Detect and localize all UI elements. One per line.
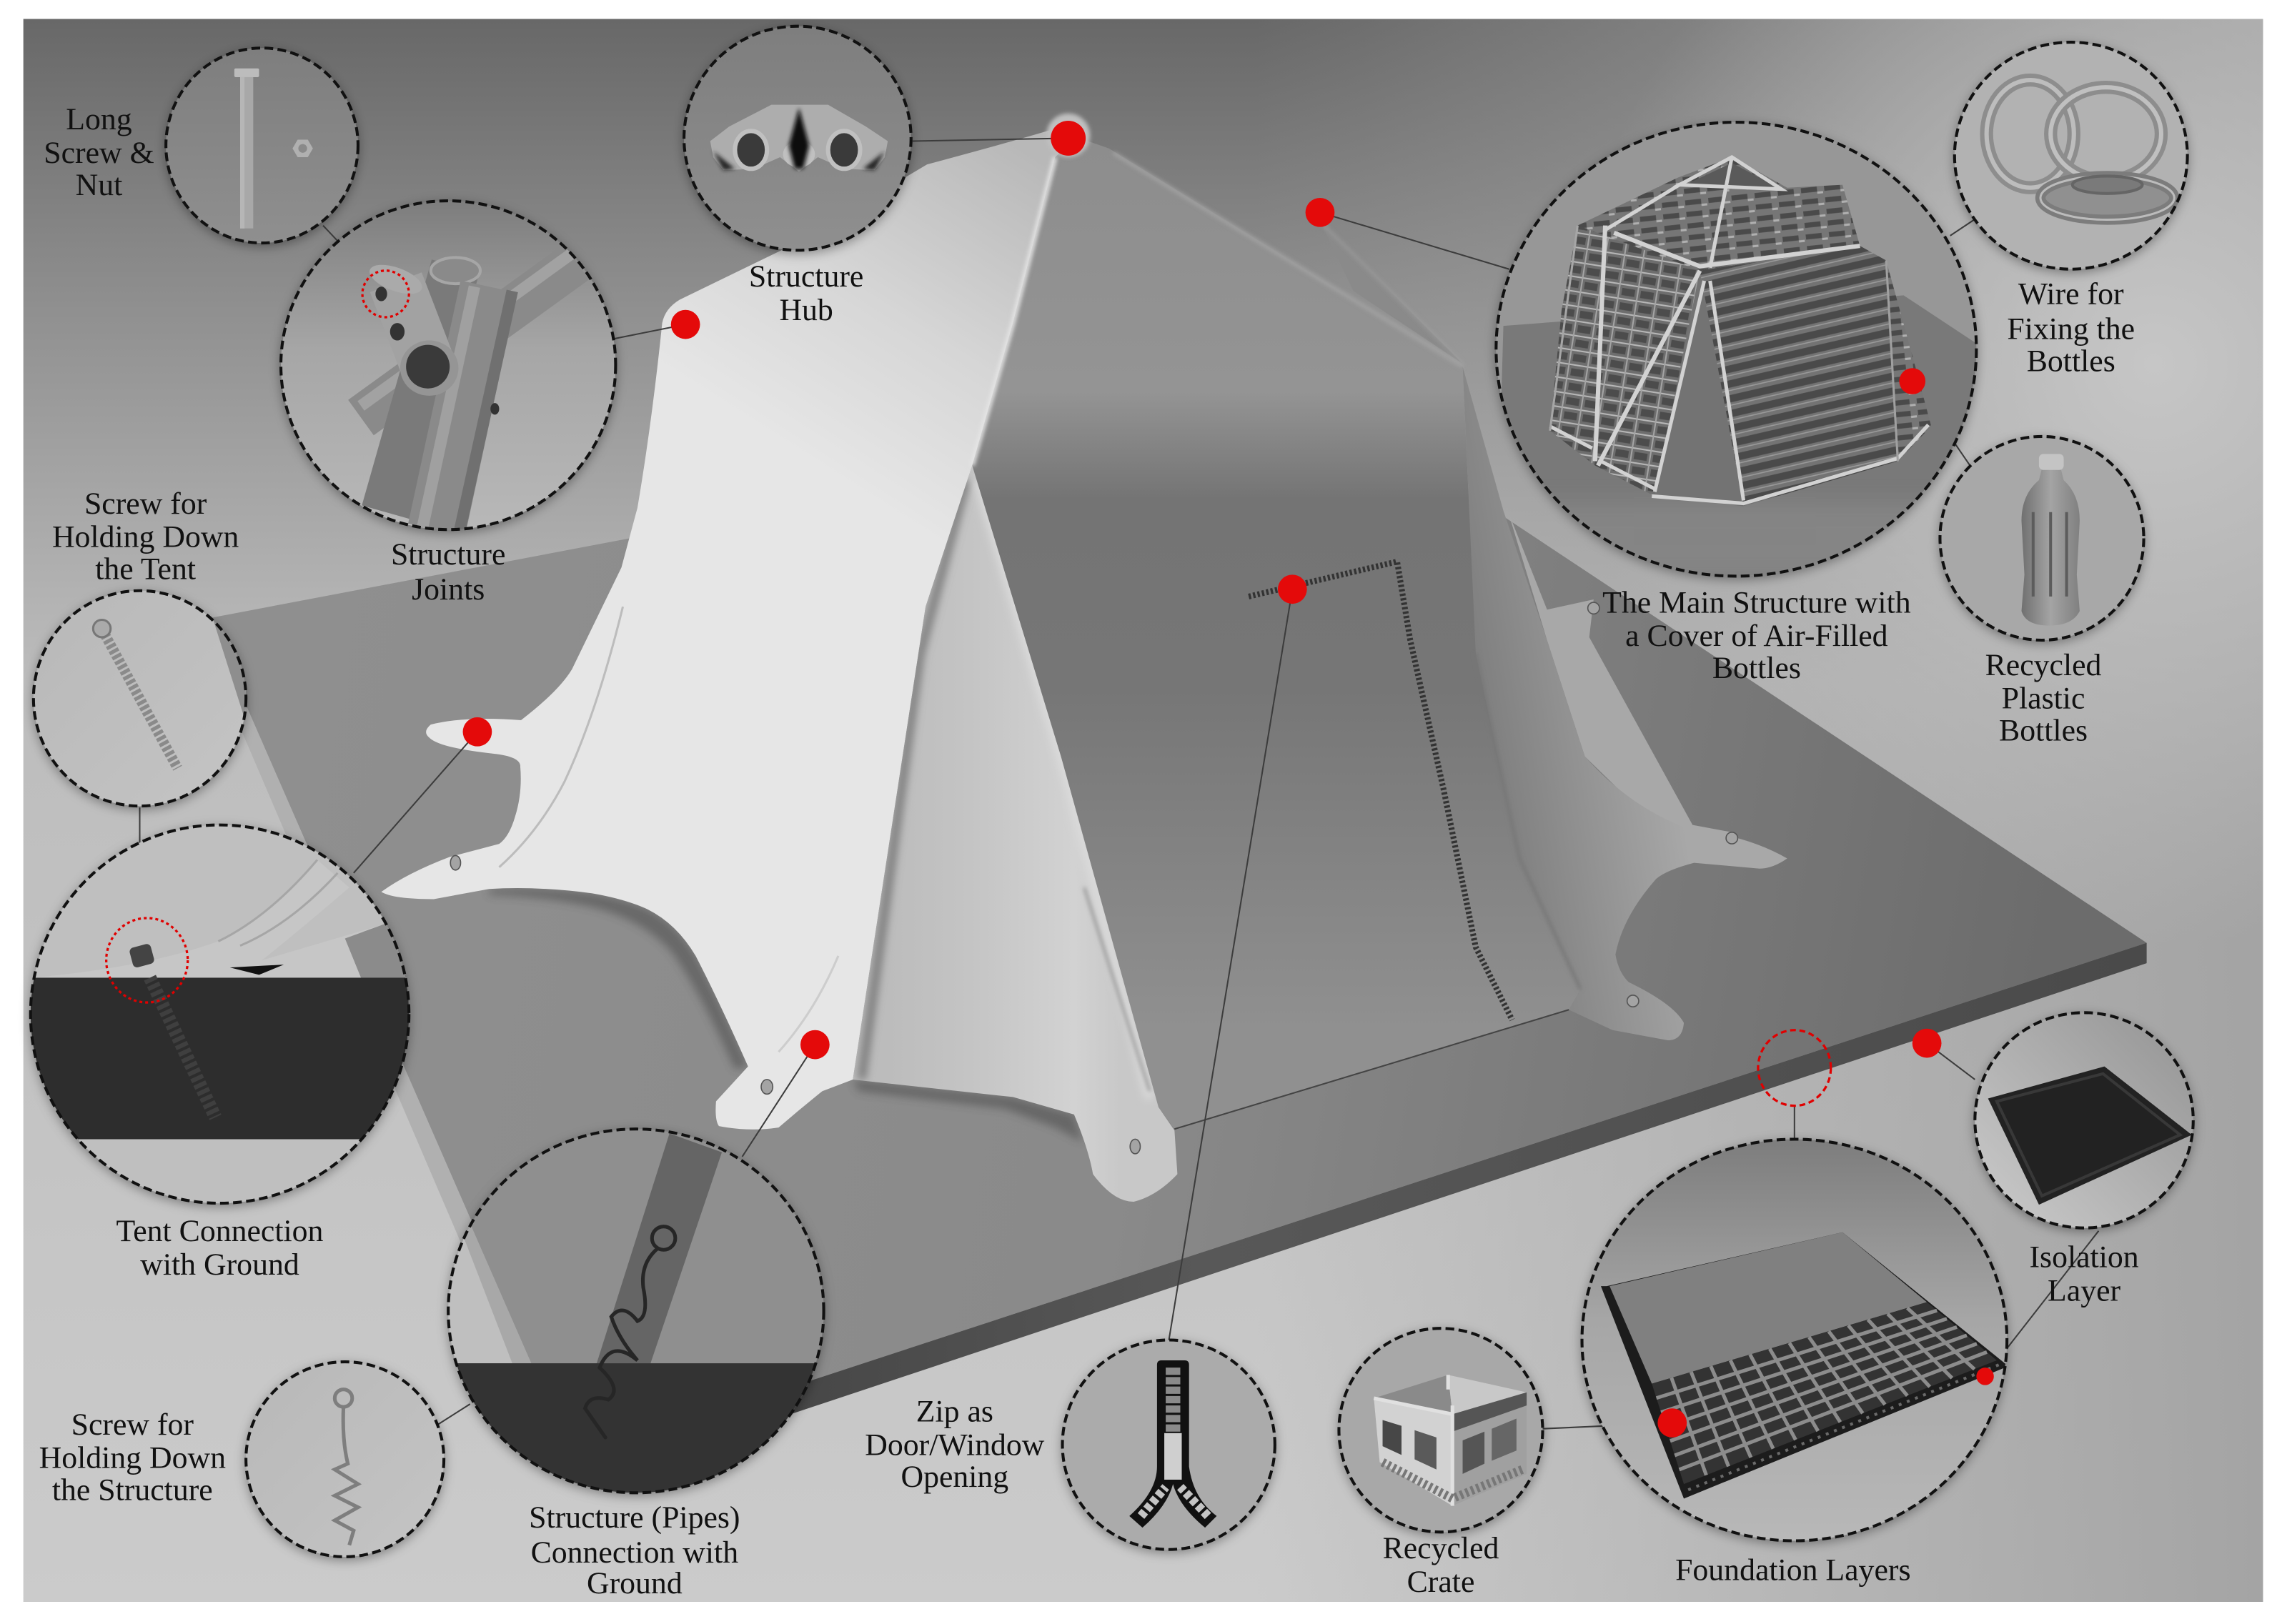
crate grid [1652, 1302, 2003, 1490]
label: structure joints: Structure [391, 537, 505, 572]
label: long screw and nut: Long [66, 102, 132, 136]
panel: zip [1063, 1340, 1275, 1550]
label: tent connection with ground: Tent Connection [116, 1214, 324, 1248]
label: structure hub: Hub [779, 293, 833, 327]
label: screw for holding down the tent: the Tent [95, 552, 196, 586]
label: long screw and nut: Nut [76, 168, 122, 202]
panel: structure hub [684, 26, 911, 250]
leader lines [139, 138, 2098, 1429]
label: recycled crate: Recycled [1383, 1531, 1499, 1565]
icon: anchor screw in pipe [585, 1227, 675, 1438]
label: isolation layer: Layer [2048, 1274, 2120, 1308]
label: long screw and nut: Screw & [44, 136, 154, 170]
label: tent connection with ground: with Ground [140, 1247, 299, 1282]
label: screw for holding down the tent: Holding Down [52, 520, 239, 554]
ground cross-section [22, 977, 422, 1139]
tent flap [32, 860, 383, 977]
red marker ring [106, 918, 188, 1002]
icon: bottle [2021, 454, 2080, 626]
tent [382, 114, 1787, 1202]
label: structure joints: Joints [412, 572, 485, 607]
slab strip edge line at front [1174, 1010, 1569, 1129]
panel: long screw and nut [166, 48, 358, 243]
panel: isolation layer [1975, 1012, 2193, 1228]
red location dots [463, 121, 1994, 1438]
apex halo [1046, 114, 1090, 157]
top plate [1609, 1232, 1927, 1384]
panel: structure joints [281, 201, 615, 529]
pipe: horizontal [361, 250, 576, 417]
panel: recycled crate [1339, 1328, 1543, 1532]
slab corner [344, 925, 405, 977]
label: zip as door or window opening: Opening [901, 1460, 1008, 1494]
dark right tent face [972, 134, 1580, 1129]
bottle-clad dome [1550, 157, 1931, 507]
panel: recycled plastic bottle [1940, 437, 2144, 640]
light floor left of slab [437, 1120, 531, 1363]
ground section [437, 1363, 837, 1502]
icon: tent screw [93, 619, 177, 768]
dome pipe frame [1550, 157, 1928, 504]
label: recycled plastic bottles: Plastic [2002, 682, 2085, 716]
front tent panel [853, 466, 1177, 1202]
icon: crate [1374, 1375, 1527, 1506]
label: main structure with cover of air-filled bottles: Bottles [1712, 651, 1801, 685]
label: screw for holding down the structure: Holding Down [39, 1441, 226, 1475]
red marker ring: foundation edge [1758, 1030, 1831, 1106]
panel: structure pipes connection with ground [437, 1120, 837, 1502]
label: structure pipes connection with ground: Connection with [531, 1535, 738, 1570]
label: screw for holding down the tent: Screw for [84, 487, 207, 521]
icon: zipper [1129, 1360, 1216, 1528]
label: structure pipes connection with ground: Structure (Pipes) [529, 1500, 740, 1535]
pipe: back upright [386, 257, 480, 512]
label: structure pipes connection with ground: Ground [587, 1566, 683, 1600]
pegs [450, 602, 1737, 1154]
white left tent face [382, 129, 1084, 1130]
zip opening [1249, 562, 1512, 1020]
panel: main structure with bottle cover [1496, 122, 1991, 582]
red marker ring [362, 271, 409, 317]
label: zip as door or window opening: Door/Window [865, 1428, 1045, 1462]
pipe: front upright [422, 287, 512, 529]
shadow on the slab beneath tent edges [489, 888, 1083, 1142]
icon: isolation tray [1988, 1067, 2192, 1205]
ground slab [197, 404, 2147, 1474]
label: screw for holding down the structure: the Structure [52, 1473, 213, 1507]
icon: wire coils [1987, 80, 2174, 220]
faint upper-right tent slope [1320, 221, 1463, 364]
label: structure hub: Structure [749, 259, 863, 294]
label: isolation layer: Isolation [2029, 1240, 2139, 1275]
icon: hub connector [710, 105, 888, 171]
panel: screw for holding down the structure [246, 1362, 444, 1557]
panel: foundation layers [1582, 1139, 2008, 1541]
panel: screw for holding down the tent [34, 591, 262, 815]
slab in the magnified view [1496, 295, 1980, 582]
panel: wire coils [1955, 42, 2188, 269]
panel: tent connection with ground [22, 825, 422, 1203]
icon: anchored screw [129, 943, 215, 1117]
pipe: short front joint [366, 259, 499, 414]
label: wire for fixing the bottles: Bottles [2027, 344, 2115, 378]
label: main structure with cover of air-filled bottles: a Cover of Air-Filled [1625, 619, 1888, 653]
tent creases [499, 153, 1580, 1052]
label: recycled crate: Crate [1407, 1565, 1474, 1599]
label: recycled plastic bottles: Recycled [1985, 648, 2102, 682]
label: main structure with cover of air-filled bottles: The Main Structure with [1602, 585, 1911, 619]
right band of tent with two feet [1463, 367, 1787, 1040]
label: wire for fixing the bottles: Wire for [2018, 277, 2124, 312]
icon: spiral screw [334, 1390, 358, 1545]
icon: long screw [234, 69, 259, 229]
far wing strip [1508, 511, 1732, 858]
label: wire for fixing the bottles: Fixing the [2007, 312, 2135, 346]
label: zip as door or window opening: Zip as [916, 1395, 993, 1429]
label: foundation layers: Foundation Layers [1675, 1553, 1910, 1587]
label: screw for holding down the structure: Screw for [71, 1408, 194, 1442]
label: recycled plastic bottles: Bottles [1999, 714, 2088, 748]
icon: nut [292, 140, 313, 157]
pipe section [597, 1133, 722, 1363]
plate frame [1601, 1232, 2008, 1498]
